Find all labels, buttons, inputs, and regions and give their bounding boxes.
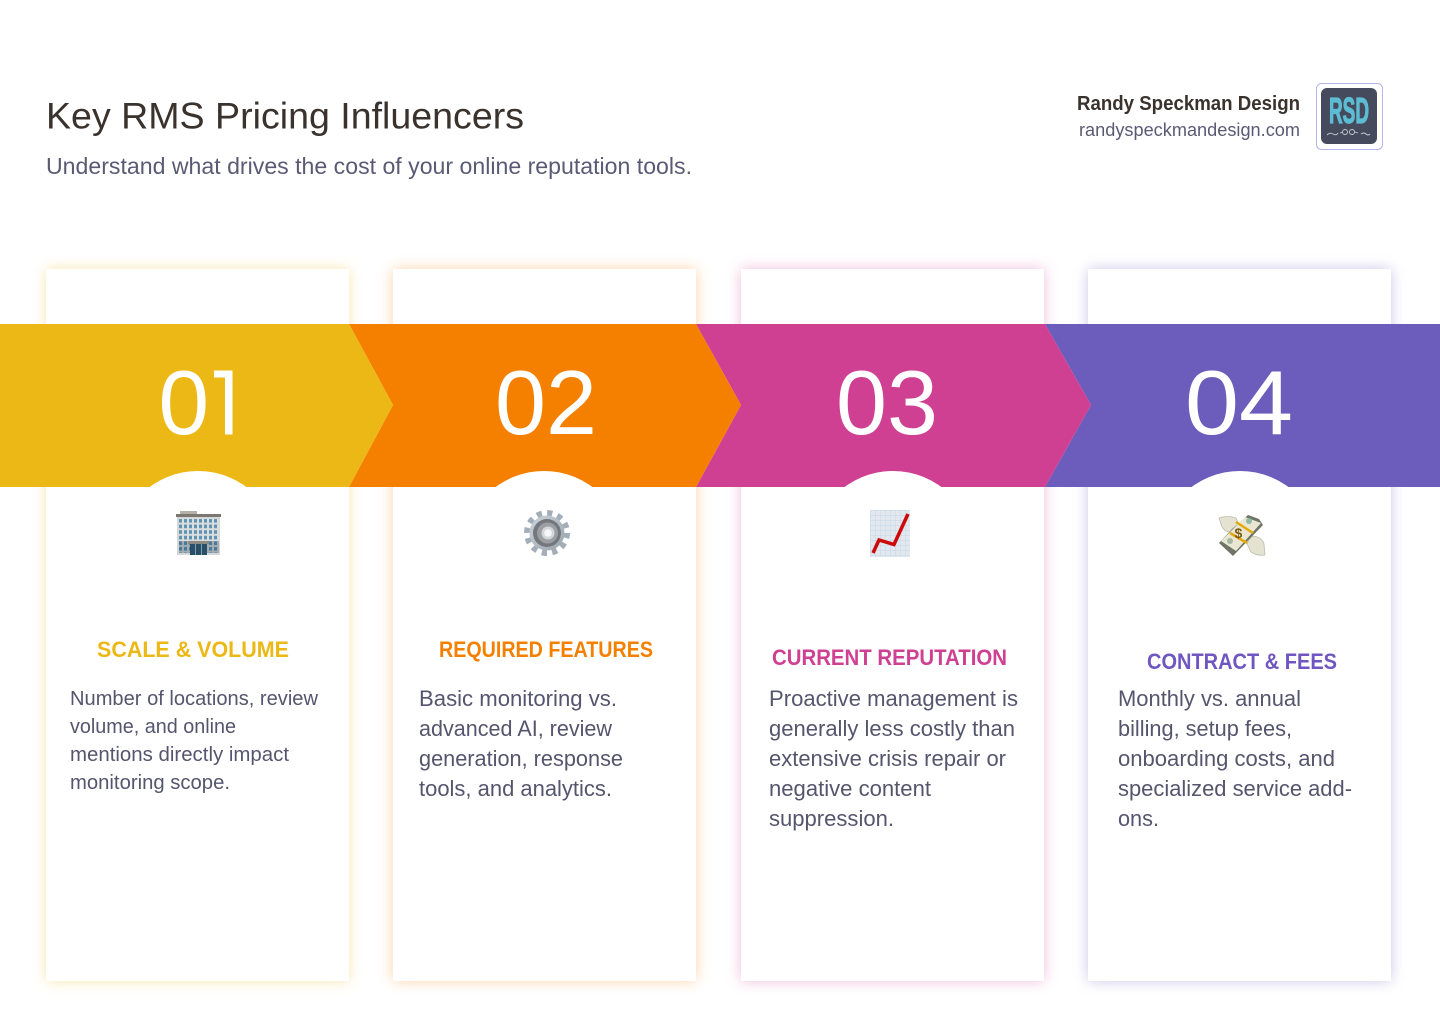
body: ons. (1118, 806, 1159, 831)
brand url: randyspeckmandesign.com (1079, 120, 1300, 140)
left wing (1219, 516, 1239, 533)
icon: money with wings: $ (1234, 525, 1242, 541)
arrow band 2 (349, 324, 741, 487)
icon: office building (176, 511, 221, 555)
body: Basic monitoring vs. (419, 686, 617, 711)
logo (1316, 84, 1382, 150)
title: Key RMS Pricing Influencers (46, 96, 524, 136)
body: billing, setup fees, (1118, 716, 1292, 741)
panel text: contract and fees (1118, 649, 1352, 831)
bill stack (1219, 515, 1263, 556)
number 03: 03 (836, 353, 938, 454)
icon: rising chart (870, 510, 910, 557)
body: generation, response (419, 746, 623, 771)
panel text: scale and volume (70, 637, 319, 794)
panel: card 3 (741, 269, 1044, 981)
arrow band 1 (0, 324, 393, 487)
body: specialized service add- (1118, 776, 1352, 801)
body: tools, and analytics. (419, 776, 612, 801)
body: mentions directly impact (70, 744, 289, 766)
heading: REQUIRED FEATURES (439, 637, 653, 662)
brand name: Randy Speckman Design (1077, 93, 1300, 115)
icon: gear (528, 514, 566, 552)
panel: card 2 (393, 269, 696, 981)
body: monitoring scope. (70, 772, 230, 794)
number 02: 02 (495, 353, 597, 454)
heading: CURRENT REPUTATION (772, 645, 1007, 670)
panel text: current reputation (769, 645, 1018, 831)
heading: SCALE & VOLUME (97, 637, 289, 662)
number 01: 1 (199, 353, 250, 454)
panel: card 1 (46, 269, 349, 981)
number 01: 0 (158, 353, 209, 454)
body: volume, and online (70, 716, 236, 738)
body: extensive crisis repair or (769, 746, 1006, 771)
body: generally less costly than (769, 716, 1015, 741)
panel: card 4 (1088, 269, 1391, 981)
arrow band 4 (1045, 324, 1440, 487)
body: negative content (769, 776, 931, 801)
logo: RSD (1329, 90, 1369, 131)
icon: money with wings (1219, 515, 1265, 556)
right wing (1247, 536, 1265, 555)
circle notches (150, 471, 1288, 487)
body: Proactive management is (769, 686, 1018, 711)
panel text: required features (419, 637, 653, 801)
body: onboarding costs, and (1118, 746, 1335, 771)
body (70, 688, 319, 794)
body (1118, 686, 1352, 831)
body: advanced AI, review (419, 716, 612, 741)
subtitle: Understand what drives the cost of your online reputation tools. (46, 153, 692, 179)
body: Number of locations, review (70, 688, 319, 710)
body: suppression. (769, 806, 894, 831)
brand block (1077, 84, 1382, 150)
number 04: 04 (1185, 353, 1293, 454)
heading: CONTRACT & FEES (1147, 649, 1337, 674)
body: Monthly vs. annual (1118, 686, 1301, 711)
arrow band 3 (696, 324, 1091, 487)
body (419, 686, 623, 801)
number 01 (162, 370, 232, 435)
body (769, 686, 1018, 831)
